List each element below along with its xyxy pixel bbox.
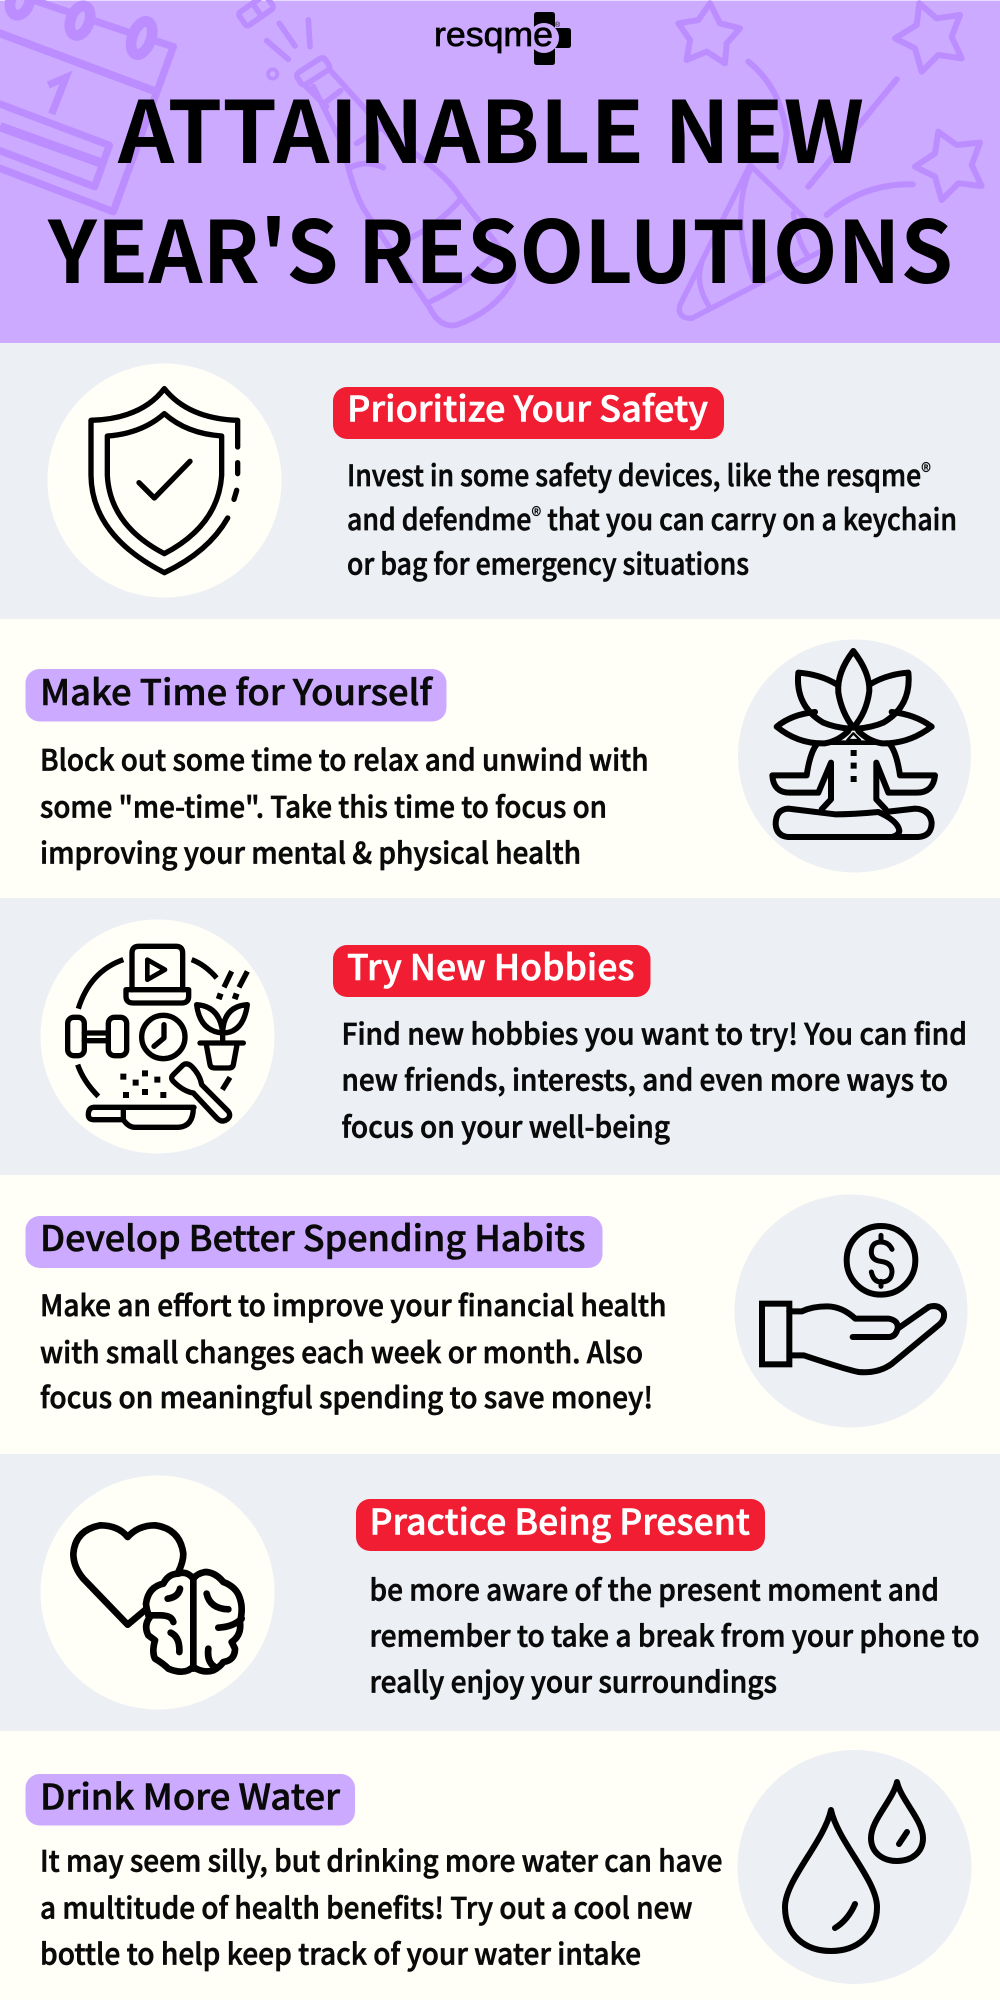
text block: with small changes each week or month. Also bbox=[40, 1330, 643, 1372]
heading pill: Practice Being Present bbox=[370, 1494, 750, 1546]
icon: meditating figure with lotus bbox=[738, 640, 971, 872]
panel: drink more water bbox=[0, 1731, 1000, 2000]
heading pill: Develop Better Spending Habits bbox=[40, 1211, 586, 1262]
text block: new friends, interests, and even more ways to bbox=[342, 1057, 948, 1099]
text block: be more aware of the present moment and bbox=[370, 1567, 939, 1609]
icon: shield with check bbox=[48, 364, 282, 598]
logo: resqme: ® bbox=[555, 21, 561, 29]
icon: calendar bbox=[0, 0, 173, 212]
text block: focus on meaningful spending to save money! bbox=[40, 1375, 653, 1417]
heading pill: Make Time for Yourself bbox=[40, 665, 434, 716]
text block bbox=[370, 1567, 980, 1701]
icon: hand with coin bbox=[734, 1194, 968, 1428]
text block: that you can carry on a keychain bbox=[541, 497, 957, 539]
text block: and defendme bbox=[347, 497, 547, 539]
logo: resqme: resqme bbox=[434, 16, 553, 54]
text block: or bag for emergency situations bbox=[347, 542, 749, 584]
panel: make time for yourself bbox=[0, 619, 1000, 898]
panel: practice being present bbox=[0, 1454, 1000, 1731]
text block: remember to take a break from your phone to bbox=[370, 1613, 980, 1655]
logo: resqme bbox=[434, 12, 571, 65]
title bbox=[47, 63, 953, 308]
icon: champagne bottle bbox=[238, 0, 514, 325]
icon: heart and brain bbox=[40, 1476, 274, 1710]
text block: Invest in some safety devices, like the resqme bbox=[347, 453, 973, 495]
panel: develop better spending habits bbox=[0, 1175, 1000, 1454]
text block: Find new hobbies you want to try! You can find bbox=[342, 1011, 967, 1053]
text block bbox=[40, 1838, 722, 1973]
text block: improving your mental & physical health bbox=[40, 830, 581, 872]
text block: really enjoy your surroundings bbox=[370, 1659, 777, 1701]
icon: water drops bbox=[738, 1750, 972, 1984]
text block bbox=[347, 453, 957, 584]
panel: header bbox=[0, 0, 1000, 343]
text block: Make an effort to improve your financial health bbox=[40, 1283, 666, 1325]
text block: focus on your well-being bbox=[342, 1104, 670, 1146]
text block: a multitude of health benefits! Try out a cool new bbox=[40, 1885, 692, 1927]
icon: hobbies collage bbox=[40, 920, 274, 1154]
text block: Block out some time to relax and unwind with bbox=[40, 738, 648, 780]
text block: bottle to help keep track of your water intake bbox=[40, 1931, 641, 1973]
title: YEAR'S RESOLUTIONS bbox=[47, 183, 953, 308]
panel: prioritize your safety bbox=[0, 343, 1000, 619]
text block: It may seem silly, but drinking more water can have bbox=[40, 1838, 722, 1880]
heading pill: Try New Hobbies bbox=[347, 940, 634, 991]
text block bbox=[40, 738, 648, 872]
icon: party hat and stars bbox=[678, 3, 982, 318]
text block: ® bbox=[531, 499, 541, 531]
heading pill: Drink More Water bbox=[40, 1769, 341, 1820]
title: ATTAINABLE NEW bbox=[117, 63, 864, 188]
text block bbox=[40, 1283, 666, 1417]
panel: try new hobbies bbox=[0, 898, 1000, 1175]
text block bbox=[342, 1011, 967, 1146]
text block: ® bbox=[921, 455, 931, 487]
text block: some "me-time". Take this time to focus on bbox=[40, 784, 607, 826]
heading pill: Prioritize Your Safety bbox=[347, 382, 708, 432]
